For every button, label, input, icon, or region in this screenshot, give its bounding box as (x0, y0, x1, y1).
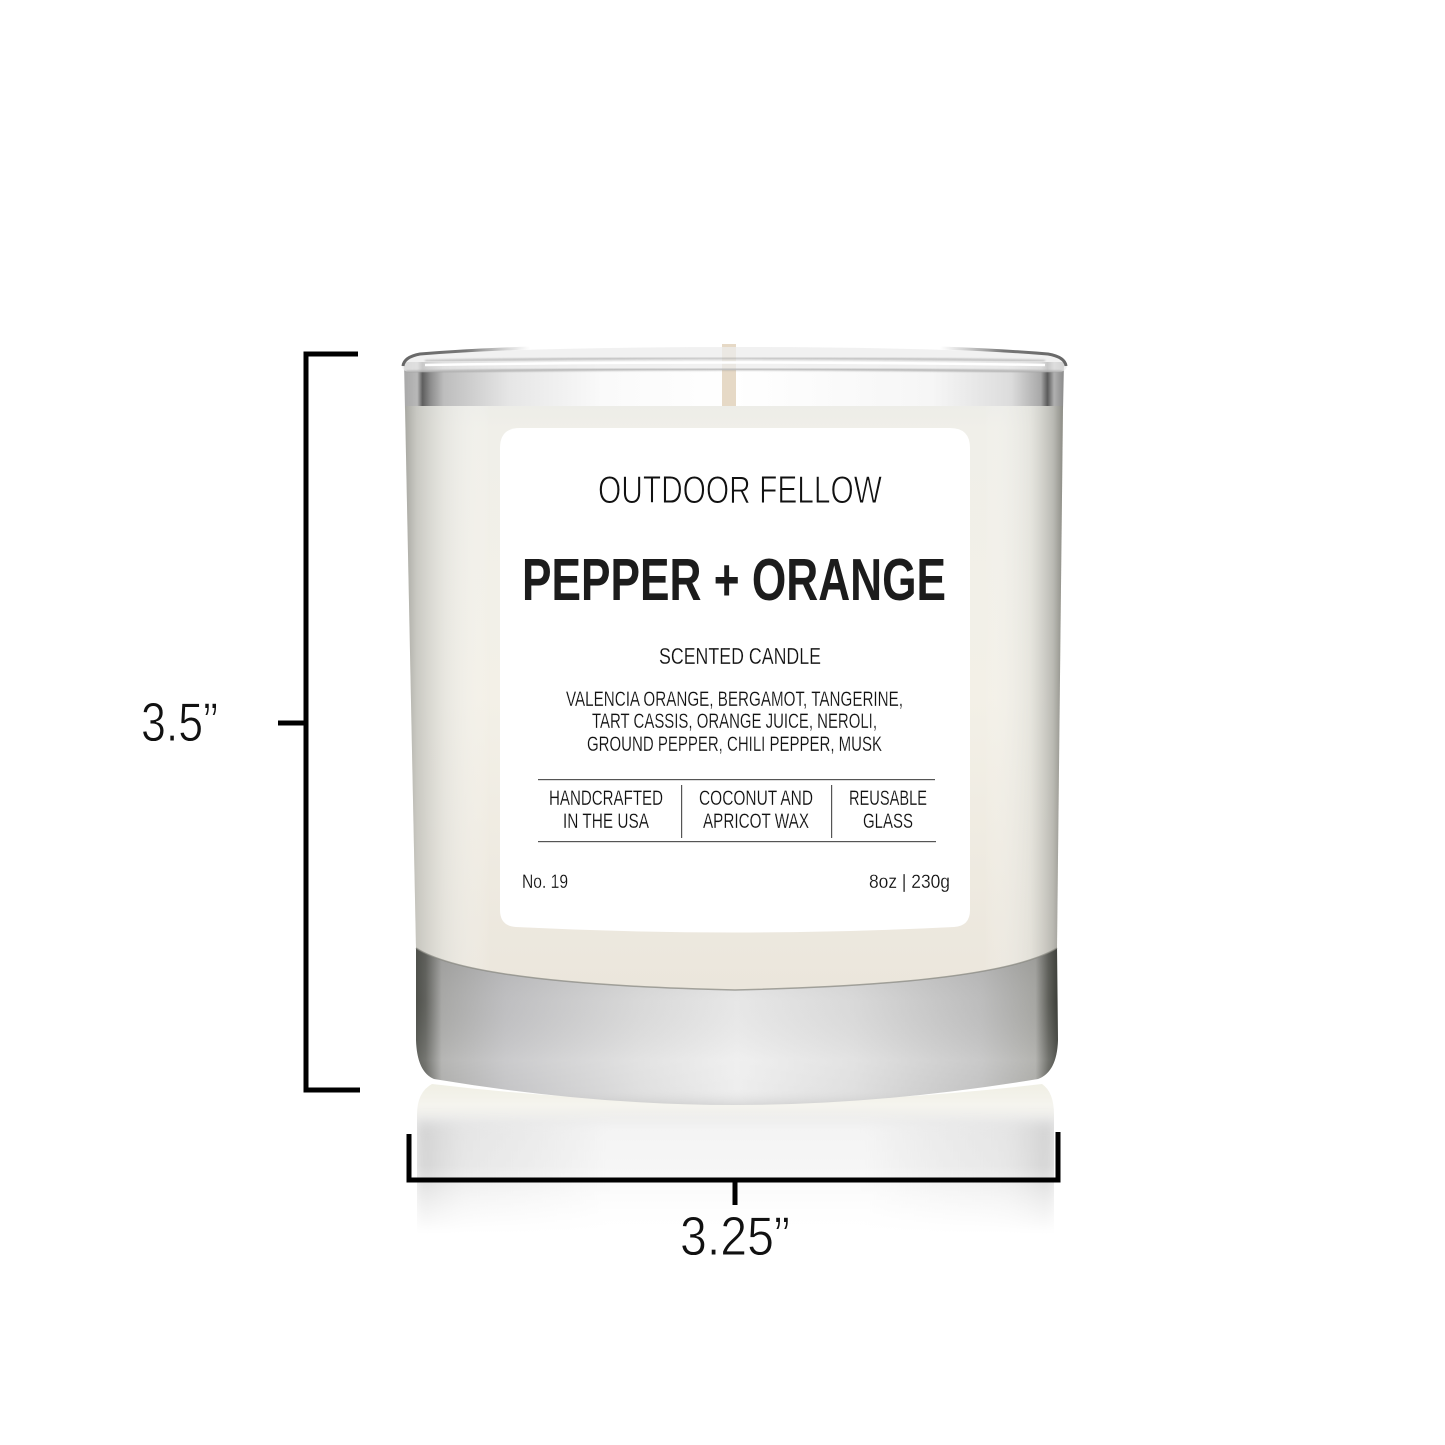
scent notes: VALENCIA ORANGE, BERGAMOT, TANGERINE, (566, 688, 903, 711)
product type: SCENTED CANDLE (659, 643, 821, 669)
scent notes (566, 688, 903, 756)
label background (500, 428, 970, 932)
infographic: candle with dimensions (143, 344, 1068, 1255)
candle jar (402, 344, 1067, 1105)
scent name: PEPPER + ORANGE (522, 547, 946, 613)
feature table: GLASS (863, 810, 913, 833)
candle reflection (417, 1084, 1054, 1218)
feature table: HANDCRAFTED (549, 787, 663, 810)
feature table: APRICOT WAX (703, 810, 809, 833)
feature table: REUSABLE (849, 787, 927, 810)
wax body (405, 406, 1063, 990)
wick (722, 344, 736, 406)
height bracket (278, 354, 360, 1090)
width bracket (409, 1132, 1058, 1205)
glass rim (402, 347, 1067, 372)
feature table: IN THE USA (563, 810, 649, 833)
batch number: No. 19 (522, 872, 568, 893)
net weight: 8oz | 230g (869, 872, 950, 893)
width label: 3.25” (680, 1205, 790, 1267)
brand name: OUTDOOR FELLOW (598, 469, 882, 512)
feature table: COCONUT AND (699, 787, 813, 810)
product label (500, 428, 970, 932)
glass upper section (404, 362, 1064, 410)
scent notes: TART CASSIS, ORANGE JUICE, NEROLI, (592, 710, 877, 733)
height label: 3.5” (141, 691, 218, 753)
glass base (416, 945, 1058, 1105)
feature table (538, 779, 936, 842)
scent notes: GROUND PEPPER, CHILI PEPPER, MUSK (587, 733, 882, 756)
